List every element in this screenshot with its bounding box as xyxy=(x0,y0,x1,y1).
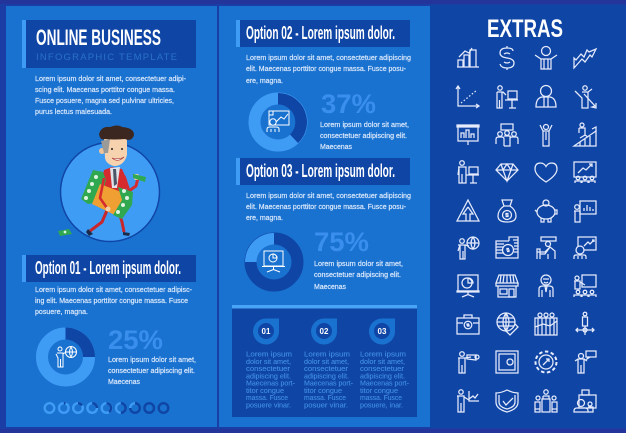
stat: 25%: 25% xyxy=(108,325,163,355)
icon: heart xyxy=(535,163,557,182)
icon: presentation audience xyxy=(574,275,596,297)
icon: presenter with board and person xyxy=(574,390,596,412)
text block: step 01: consectetuer xyxy=(246,364,291,373)
icon: presenter with board xyxy=(497,86,518,108)
text block: 75 percent caption xyxy=(314,259,403,291)
text block: step 01: Lorem ipsum xyxy=(246,350,292,358)
icon: climbing growth chart xyxy=(574,123,596,146)
text block: introduction: Lorem ipsum dolor sit amet, consectetuer adipi- xyxy=(35,74,187,83)
panel: left column xyxy=(6,6,217,427)
icon: piggy bank xyxy=(535,200,557,222)
text block: step 01: adipiscing elit. xyxy=(246,372,291,380)
text block: option 02: ere, magna. xyxy=(246,76,283,85)
chart: 25 percent donut xyxy=(42,328,95,380)
text block: 37 percent caption: Lorem ipsum dolor sit amet, xyxy=(320,120,409,129)
icon: team over bars xyxy=(535,313,557,335)
icon: triangle up arrow xyxy=(457,200,479,221)
text block: step 01 xyxy=(246,350,296,410)
text block: option 02: elit. Maecenas porttitor congue massa. Fusce posu- xyxy=(246,64,407,73)
text block: step 02: titor congue xyxy=(304,386,342,395)
icon: man with chart board xyxy=(574,201,596,222)
text block: step 02: Lorem ipsum xyxy=(304,350,350,358)
icon: storefront xyxy=(496,275,518,297)
text block: 25 percent caption: Maecenas xyxy=(108,377,140,386)
chart: 75 percent donut xyxy=(245,233,298,286)
icon: man with speech bubble xyxy=(575,351,596,373)
icon: team with sign xyxy=(496,124,518,146)
text block: 25 percent caption: consectetuer adipiscing elit. xyxy=(108,366,195,375)
text block: step 01: massa. Fusce xyxy=(246,393,288,402)
icon: falling arrow xyxy=(574,49,596,68)
panel: numbered steps xyxy=(232,305,417,417)
text block: option 03: Lorem ipsum dolor sit amet, consectetuer adipiscing xyxy=(246,191,411,200)
heading: online business: INFOGRAPHIC TEMPLATE xyxy=(36,52,177,63)
badge: 01: 01 xyxy=(262,327,271,336)
text block: step 01: titor congue xyxy=(246,386,284,395)
text block: 75 percent caption: consectetuer adipiscing elit. xyxy=(314,270,401,279)
text block: step 03: adipiscing elit. xyxy=(360,372,405,380)
text block: 37 percent caption: consectetuer adipiscing elit. xyxy=(320,131,407,140)
icon: shield with check xyxy=(496,390,518,412)
text block: step 02: posuer vinar. xyxy=(304,400,348,410)
text block: 25 percent caption xyxy=(108,355,196,386)
text block: step 03: titor congue xyxy=(360,386,398,395)
text block: introduction xyxy=(35,74,187,116)
heading: extras: EXTRAS xyxy=(487,15,563,43)
badge: 03: 03 xyxy=(378,327,387,336)
text block: option 01: Lorem ipsum dolor sit amet, consectetuer adipisc- xyxy=(35,285,193,294)
icon: presenter bust with chart xyxy=(574,237,596,259)
text block: 75 percent caption: Lorem ipsum dolor sit amet, xyxy=(314,259,403,268)
text block: step 02: adipiscing elit. xyxy=(304,372,349,380)
badge: 02: 02 xyxy=(320,327,329,336)
illustration: businessman carrying money xyxy=(60,126,160,242)
icon: chart with audience xyxy=(574,162,596,183)
icon: man with line chart xyxy=(457,390,479,412)
text block: option 03: elit. Maecenas porttitor congue massa. Fusce posu- xyxy=(246,202,407,211)
text block: step 02: dolor sit amet, xyxy=(304,357,349,366)
text block: option 03: ere, magna. xyxy=(246,213,283,222)
heading: option 02: Option 02 - Lorem ipsum dolor. xyxy=(246,23,395,43)
icon: diamond xyxy=(496,164,518,181)
text block: step 03: consectetuer xyxy=(360,364,405,373)
heading: online business xyxy=(22,20,196,68)
text block: step 03: dolor sit amet, xyxy=(360,357,405,366)
icon: money bag xyxy=(498,200,516,222)
badge: 02 xyxy=(311,318,337,344)
text block: step 03: massa. Fusce xyxy=(360,393,402,402)
text block: 75 percent caption: Maecenas xyxy=(314,282,346,291)
icon: presenter with chart xyxy=(267,111,289,132)
icon: man cheering xyxy=(540,124,552,146)
icon: speaker at lectern xyxy=(458,161,479,183)
text block: step 03: Maecenas port- xyxy=(360,378,410,388)
panel: right extras background xyxy=(430,5,626,428)
icon: smiling man xyxy=(539,275,553,297)
text block: step 03: Lorem ipsum xyxy=(360,350,406,358)
icon: scatter axes xyxy=(456,86,479,108)
badge: 03 xyxy=(369,318,395,344)
text block: 37 percent caption xyxy=(320,120,409,151)
text block: step 02: Maecenas port- xyxy=(304,378,354,388)
stat: 75%: 75% xyxy=(314,227,369,257)
text block: step 01: posuere vinar. xyxy=(246,400,291,410)
icon: coins with dollar xyxy=(496,237,518,258)
heading: option 03: Option 03 - Lorem ipsum dolor. xyxy=(246,161,395,181)
icon grid: extras xyxy=(456,46,596,412)
text block: introduction: Fusce posuere, magna sed pulvinar ultricies, xyxy=(35,96,174,105)
text block: 37 percent caption: Maecenas xyxy=(320,142,352,151)
text block: option 03 xyxy=(246,191,411,222)
icon: man standing on compass arrows xyxy=(576,312,594,335)
text block: step 03 xyxy=(360,350,410,410)
heading: online business: ONLINE BUSINESS xyxy=(36,25,161,50)
icon: monitor with pie chart xyxy=(262,251,285,272)
icon: man with globe xyxy=(458,237,479,259)
pagination: progress rings xyxy=(45,403,168,413)
text block: step 03: posuere, inar. xyxy=(360,400,403,410)
icon: safe xyxy=(496,351,518,373)
icon: meeting group xyxy=(535,390,557,412)
text block: option 02 xyxy=(246,53,411,85)
text block: option 01: posuere, magna. xyxy=(35,307,88,316)
icon: man with globe xyxy=(56,346,76,367)
heading: option 02 xyxy=(236,20,410,47)
text block: step 01: dolor sit amet, xyxy=(246,357,291,366)
icon: businessman bust xyxy=(536,86,556,107)
badge: 01 xyxy=(253,318,279,344)
heading: option 01 xyxy=(22,255,196,282)
text block: option 02: Lorem ipsum dolor sit amet, consectetuer adipiscing xyxy=(246,53,411,62)
icon: monitor with pie xyxy=(457,275,479,297)
icon: projector chart xyxy=(457,125,479,145)
text block: step 02 xyxy=(304,350,354,410)
text block: step 01: Maecenas port- xyxy=(246,378,296,388)
text block: introduction: scing elit. Maecenas porttitor congue massa. xyxy=(35,85,175,94)
panel: middle column xyxy=(219,6,430,427)
icon: worker at desk xyxy=(537,237,556,259)
icon: man with telescope xyxy=(458,352,479,373)
text block: 25 percent caption: Lorem ipsum dolor sit amet, xyxy=(108,355,196,364)
chart: 37 percent donut xyxy=(254,93,307,146)
icon: dropped banknote xyxy=(58,229,72,236)
icon: briefcase with dollar xyxy=(457,315,479,334)
heading: option 03 xyxy=(236,158,410,185)
text block: step 02: consectetuer xyxy=(304,364,349,373)
text block: introduction: purus lectus malesuada. xyxy=(35,107,112,116)
icon: globe with tag xyxy=(497,313,518,335)
text block: option 01: ing elit. Maecenas porttitor congue massa. Fusce xyxy=(35,296,188,305)
text block: step 02: massa. Fusce xyxy=(304,393,346,402)
heading: option 01: Option 01 - Lorem ipsum dolor. xyxy=(35,258,181,278)
icon: man with raised arms xyxy=(535,46,557,69)
stat: 37%: 37% xyxy=(321,89,376,119)
icon: dollar sign xyxy=(500,46,514,70)
icon: gear with arrow xyxy=(536,352,556,372)
text block: option 01 xyxy=(35,285,193,316)
icon: man with down arrow xyxy=(575,86,596,108)
icon: bar chart xyxy=(457,48,479,67)
